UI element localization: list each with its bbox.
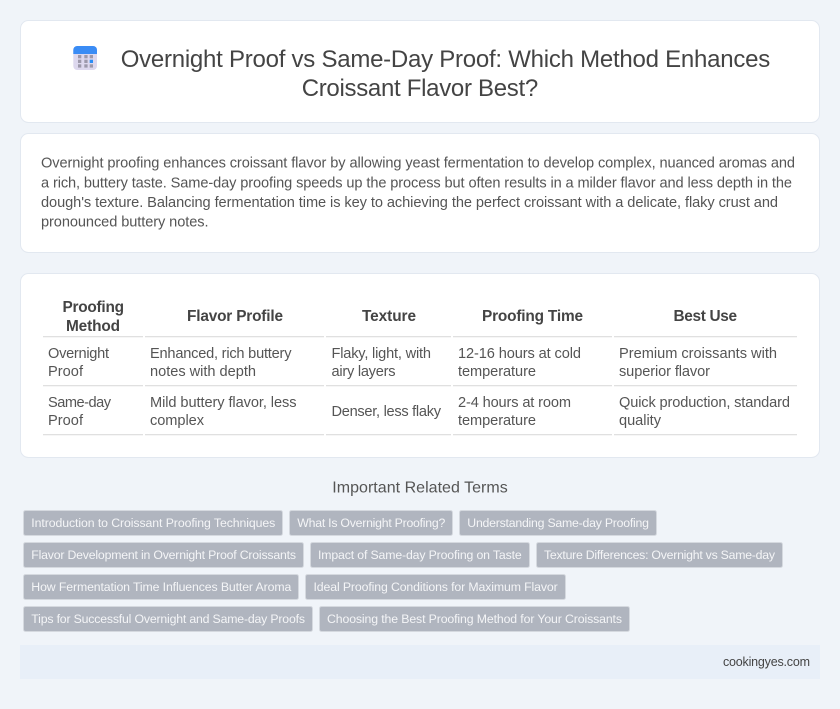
table row: same-day proof: Denser, less flaky: [332, 404, 442, 420]
tag list: related terms: Choosing the Best Proofing Method for Your Croissants: [327, 612, 622, 626]
text block: introduction paragraph: [41, 156, 795, 230]
table row: same-day proof: complex: [150, 413, 205, 429]
table row: overnight proof: notes with depth: [150, 364, 256, 380]
table header row: Proofing: [62, 299, 124, 316]
table header row: [62, 299, 737, 335]
tag list: related terms: Texture Differences: Overnight vs Same-day: [544, 548, 776, 562]
title: Overnight Proof vs Same-Day Proof: Which Method Enhances: [121, 46, 770, 73]
table row: same-day proof: quality: [619, 413, 662, 429]
panel: comparison table: [20, 274, 820, 458]
table row: overnight proof: [48, 346, 777, 380]
title: Croissant Flavor Best?: [302, 75, 538, 102]
text block: introduction paragraph: pronounced buttery notes.: [41, 214, 208, 230]
table row: same-day proof: temperature: [458, 413, 536, 429]
tag list: related terms: Understanding Same-day Proofing: [467, 516, 649, 530]
tag list: related terms: Flavor Development in Overnight Proof Croissants: [31, 548, 296, 562]
icon: calendar: [73, 46, 97, 70]
table row: overnight proof: superior flavor: [619, 364, 710, 380]
table row: same-day proof: [48, 395, 790, 429]
table row: same-day proof: Mild buttery flavor, less: [150, 395, 296, 411]
table header row: Proofing Time: [482, 308, 583, 325]
table row: overnight proof: Enhanced, rich buttery: [150, 346, 292, 362]
table row: overnight proof: Proof: [48, 364, 84, 380]
tag list: related terms: How Fermentation Time Influences Butter Aroma: [31, 580, 291, 594]
table row: overnight proof: Premium croissants with: [619, 346, 777, 362]
tag list: related terms: Tips for Successful Overnight and Same-day Proofs: [31, 612, 305, 626]
table header row: Flavor Profile: [187, 308, 283, 325]
title: [121, 46, 770, 102]
table row: same-day proof: Proof: [48, 413, 84, 429]
table row: same-day proof: Quick production, standard: [619, 395, 790, 411]
table header row: Best Use: [674, 308, 737, 325]
text block: introduction paragraph: Overnight proofing enhances croissant flavor by allowing yeast fermentation to develop complex, nuanced aromas and: [41, 156, 795, 172]
table header row: Method: [66, 318, 120, 335]
footer bar: cookingyes.com: [723, 655, 810, 669]
table row: overnight proof: temperature: [458, 364, 536, 380]
panel: header: [20, 20, 820, 122]
panel: introduction: [20, 134, 820, 252]
tag list: related terms: Impact of Same-day Proofing on Taste: [318, 548, 522, 562]
tag list: related terms: Ideal Proofing Conditions for Maximum Flavor: [314, 580, 558, 594]
table row: overnight proof: Flaky, light, with: [332, 346, 431, 362]
footer bar: [20, 645, 820, 679]
table row: overnight proof: Overnight: [48, 346, 109, 362]
tag list: related terms: What Is Overnight Proofing?: [297, 516, 445, 530]
table row: overnight proof: airy layers: [332, 364, 396, 380]
tag list: related terms: Introduction to Croissant Proofing Techniques: [31, 516, 275, 530]
text block: introduction paragraph: a rich, buttery taste. Same-day proofing speeds up the process but often results in a milder flavor and less depth in the: [41, 176, 792, 192]
table header row: Texture: [362, 308, 416, 325]
table row: same-day proof: Same-day: [48, 395, 112, 411]
tag list: related terms: [24, 510, 782, 632]
table row: overnight proof: 12-16 hours at cold: [458, 346, 581, 362]
heading: important related terms: Important Related Terms: [332, 480, 508, 496]
table row: same-day proof: 2-4 hours at room: [458, 395, 571, 411]
text block: introduction paragraph: dough's texture. Balancing fermentation time is key to achieving the perfect croissant with a delicate, flaky crust and: [41, 195, 778, 211]
